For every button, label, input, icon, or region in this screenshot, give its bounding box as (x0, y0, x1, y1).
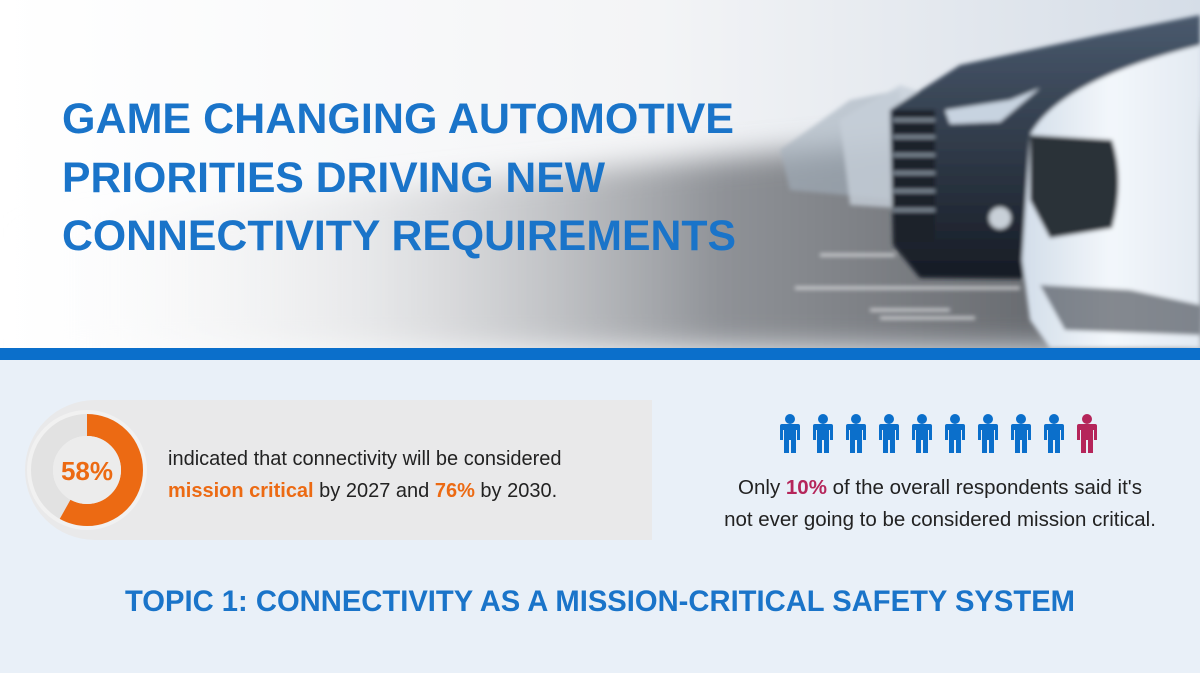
header hero image (0, 0, 1200, 348)
topic heading: TOPIC 1: CONNECTIVITY AS A MISSION-CRITICAL SAFETY SYSTEM (125, 585, 1075, 618)
white car (1022, 45, 1200, 348)
stat text: mission critical by 2027 and 76% by 2030. (168, 480, 557, 502)
parking lines (795, 255, 1020, 318)
title: PRIORITIES DRIVING NEW (62, 154, 605, 202)
panel: 58% stat (25, 400, 652, 540)
blue divider bar (0, 348, 1200, 360)
stat text: indicated that connectivity will be considered (168, 448, 562, 470)
stat text: 10%: Only 10% of the overall respondents said it's (738, 476, 1142, 499)
icon row: people 9 of 10 (780, 414, 1097, 453)
donut chart 58%: 58% (61, 456, 113, 486)
title: CONNECTIVITY REQUIREMENTS (62, 212, 736, 260)
title (62, 95, 736, 260)
title: GAME CHANGING AUTOMOTIVE (62, 95, 734, 143)
stat text: 10%: not ever going to be considered mission critical. (724, 508, 1156, 531)
stat text (168, 448, 562, 502)
stat text: 10% (724, 476, 1156, 531)
distant cars (780, 90, 900, 200)
dark car (890, 15, 1200, 280)
donut chart 58% (60, 414, 143, 526)
